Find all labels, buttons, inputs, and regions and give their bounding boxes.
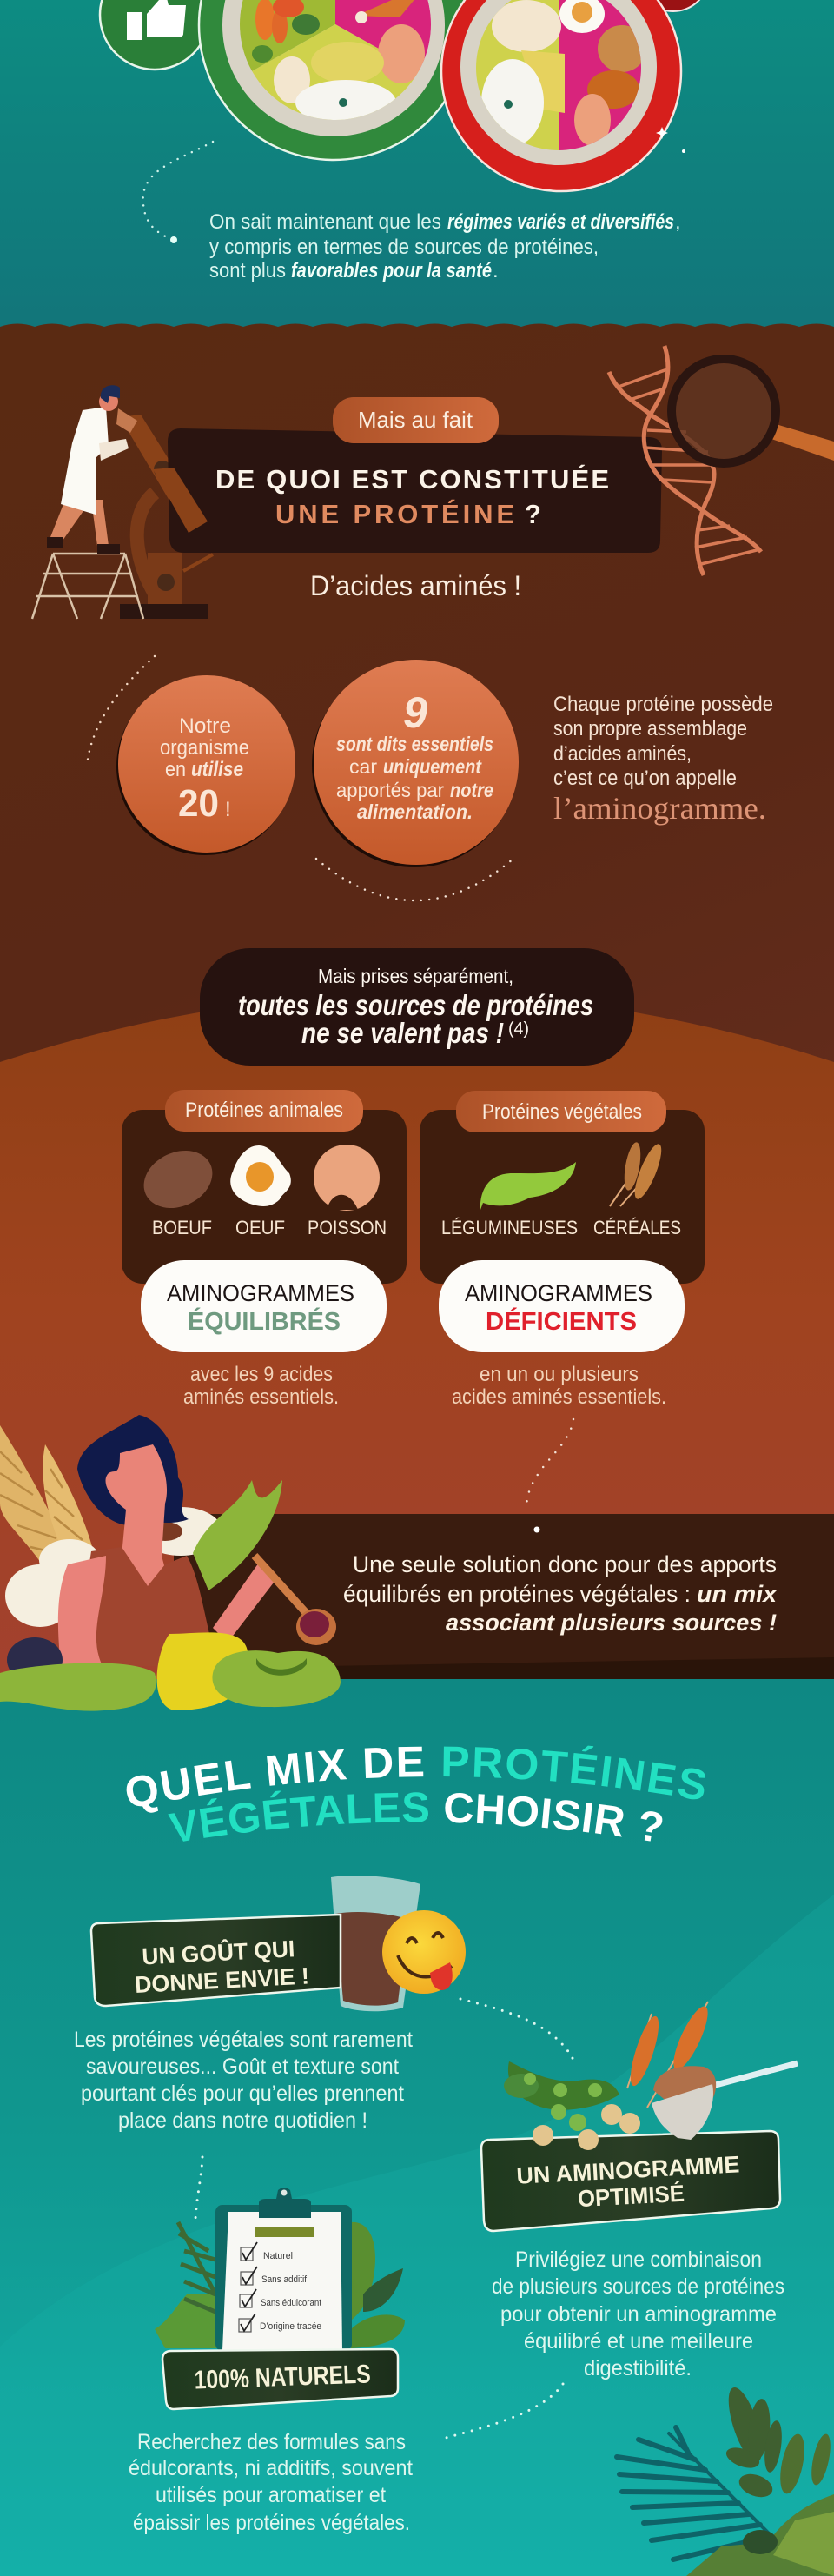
heading text: UNE PROTÉINE <box>275 499 514 529</box>
text block: régimes variés: y compris en termes de sources de protéines, <box>209 236 599 259</box>
text block: régimes variés: . <box>493 259 499 282</box>
callout text: toutes les sources de protéines <box>238 989 593 1021</box>
circle text: ! <box>225 798 231 821</box>
text block: régimes variés: , <box>675 210 681 234</box>
dotted arrow: plates to text <box>143 142 213 243</box>
panel: heading <box>168 428 662 553</box>
text: aminogramme: pour obtenir un aminogramme <box>500 2302 777 2327</box>
circle text <box>160 714 249 825</box>
ladder <box>32 554 143 619</box>
leaves right <box>351 2222 405 2348</box>
text: aminogramme: c’est ce qu’on appelle <box>553 767 737 790</box>
dark red circle <box>638 0 709 11</box>
text: naturels <box>129 2430 413 2535</box>
icon: salmon <box>314 1145 380 1211</box>
text: naturels: épaissir les protéines végétales. <box>133 2511 410 2535</box>
label: aminogramme optimisé <box>481 2131 780 2231</box>
red plate <box>441 0 681 191</box>
text: solution: équilibrés en protéines végétales : <box>343 1581 691 1607</box>
label: un goût: DONNE ENVIE ! <box>134 1962 310 1998</box>
text: goût: savoureuses... Goût et texture sont <box>86 2055 399 2079</box>
circle text: sont dits essentiels <box>336 733 493 755</box>
illustration: scoop and chickpeas over label <box>533 2063 798 2150</box>
plant labels: LÉGUMINEUSES <box>441 1217 578 1238</box>
illustration: DNA and magnifier <box>609 346 834 575</box>
heading text: DE QUOI EST CONSTITUÉE <box>215 464 609 495</box>
title: quel mix: VÉGÉTALES CHOISIR ? <box>168 1790 662 1842</box>
label: aminogramme optimisé: UN AMINOGRAMME <box>516 2151 740 2189</box>
text: solution: Une seule solution donc pour des apports <box>353 1551 777 1577</box>
text: goût <box>74 2028 413 2133</box>
dotted arrow: goût to aminogramme <box>460 1999 574 2061</box>
text block: régimes variés: On sait maintenant que les <box>209 210 441 234</box>
checklist <box>239 2242 321 2332</box>
circle text: uniquement <box>383 755 482 778</box>
circle: 9 essential <box>312 660 519 867</box>
panel: plant proteins <box>420 1091 705 1352</box>
illustration: woman with spoon <box>0 1415 341 1711</box>
illustration: microscope <box>116 408 213 619</box>
circle text: utilise <box>191 758 243 781</box>
dotted arc: left of circles <box>87 656 155 767</box>
circle text: Notre <box>179 714 231 738</box>
animal labels: POISSON <box>308 1217 387 1238</box>
cream shapes <box>139 1507 222 1556</box>
text: goût: Les protéines végétales sont rarement <box>74 2028 413 2052</box>
label: 100% naturels: 100% NATURELS <box>194 2360 371 2395</box>
sparkles <box>656 127 685 153</box>
checklist: Naturel <box>263 2251 293 2261</box>
illustration: pods and wheat <box>504 2002 714 2131</box>
thumbs-up badge <box>100 0 209 70</box>
spoon <box>255 1556 336 1645</box>
checklist: Sans additif <box>261 2274 308 2285</box>
label: un goût <box>91 1915 341 2006</box>
text: aminogramme <box>553 693 773 826</box>
circle text: notre <box>450 779 493 801</box>
text: aminogramme: digestibilité. <box>584 2356 692 2380</box>
illustration: clipboard <box>155 2188 405 2351</box>
text block: régimes variés: régimes variés et diversifiés <box>447 210 674 234</box>
title: quel mix: QUEL MIX DE PROTÉINES <box>127 1745 705 1813</box>
dotted arc: under circle 2 <box>316 859 513 900</box>
callout text: Mais prises séparément, <box>318 965 513 987</box>
pill: Protéines animales: Protéines animales <box>185 1099 343 1122</box>
corn <box>157 1632 248 1710</box>
text: naturels: utilisés pour aromatiser et <box>156 2483 386 2507</box>
circle: 20 amino acids <box>116 675 295 855</box>
circle text <box>336 688 493 823</box>
label: aminogramme optimisé: OPTIMISÉ <box>577 2180 685 2212</box>
illustration: scientist on ladder <box>32 385 143 619</box>
text: naturels: édulcorants, ni additifs, souvent <box>129 2456 413 2480</box>
checklist: D’origine tracée <box>260 2321 321 2332</box>
circle text: en <box>165 758 186 781</box>
leaves left <box>155 2222 217 2348</box>
plant labels <box>441 1217 681 1238</box>
icon: wheat <box>610 1141 666 1206</box>
panel: animal proteins <box>122 1090 407 1352</box>
label: 100% naturels <box>162 2349 398 2409</box>
text: captions: en un ou plusieurs <box>480 1363 639 1386</box>
circle text: organisme <box>160 736 249 760</box>
text: aminogramme: Privilégiez une combinaison <box>515 2247 762 2272</box>
text block: régimes variés: sont plus <box>209 259 286 282</box>
callout text: (4) <box>508 1019 529 1039</box>
circle text: apportés par <box>336 779 444 801</box>
icon: thumb <box>127 0 186 40</box>
text: aminogramme: l’aminogramme. <box>553 791 766 826</box>
dotted line: to clipboard <box>195 2157 202 2220</box>
pod bottom <box>0 1663 156 1711</box>
dark balls <box>7 1637 63 1683</box>
label: un goût: UN GOÛT QUI <box>142 1935 295 1969</box>
face and neck <box>106 1444 169 1590</box>
text: aminogramme <box>492 2247 784 2380</box>
dark band <box>174 1514 834 1679</box>
callout text <box>238 965 593 1049</box>
text: aminogramme: Chaque protéine possède <box>553 693 773 716</box>
text: solution <box>343 1551 778 1636</box>
animal labels: OEUF <box>235 1217 285 1238</box>
text: goût: place dans notre quotidien ! <box>118 2108 367 2133</box>
illustration: foliage <box>617 2384 834 2576</box>
plant labels: CÉRÉALES <box>593 1217 681 1238</box>
callout pill: toutes les sources <box>200 948 634 1066</box>
text: aminogramme: équilibré et une meilleure <box>524 2329 753 2354</box>
text: solution: un mix <box>697 1581 778 1607</box>
pill: déficients <box>439 1260 685 1352</box>
hair <box>77 1415 189 1525</box>
text: aminogramme: de plusieurs sources de protéines <box>492 2274 784 2299</box>
text: aminogramme: d’acides aminés, <box>553 742 692 766</box>
text: captions <box>183 1363 666 1409</box>
checklist: Sans édulcorant <box>261 2298 321 2308</box>
illustration: glass <box>331 1876 420 2011</box>
circle text: 9 <box>403 688 427 737</box>
text: solution: associant plusieurs sources ! <box>446 1610 777 1636</box>
wheat <box>0 1425 96 1573</box>
text: naturels: Recherchez des formules sans <box>137 2430 406 2454</box>
big bean <box>212 1650 341 1707</box>
heading text <box>215 464 609 529</box>
pill: équilibrés: ÉQUILIBRÉS <box>188 1306 341 1336</box>
section background: brown protein section <box>0 323 834 1686</box>
text: captions: acides aminés essentiels. <box>452 1385 666 1409</box>
coffee bean <box>148 1522 182 1541</box>
text block: régimes variés: favorables pour la santé <box>291 259 492 282</box>
pill: équilibrés <box>141 1260 387 1352</box>
pill: déficients: DÉFICIENTS <box>486 1306 637 1336</box>
pill: Protéines animales <box>165 1090 363 1132</box>
icon: pea pod <box>480 1162 576 1210</box>
section background: teal top <box>0 0 834 330</box>
pill: Protéines végétales: Protéines végétales <box>482 1100 642 1124</box>
title: quel mix <box>127 1745 705 1842</box>
top <box>74 1547 217 1666</box>
pill: déficients: AMINOGRAMMES <box>465 1280 652 1306</box>
text: goût: pourtant clés pour qu’elles prennent <box>81 2081 404 2106</box>
animal labels <box>152 1217 387 1238</box>
text: D'acides aminés: D’acides aminés ! <box>310 570 521 601</box>
dotted line: to naturels text <box>446 2384 563 2438</box>
pill: Mais au fait: Mais au fait <box>358 407 473 433</box>
section background: teal bottom <box>0 1679 834 2576</box>
green plate <box>199 0 468 160</box>
animal labels: BOEUF <box>152 1217 212 1238</box>
pill: Protéines végétales <box>456 1091 666 1132</box>
callout text: ne se valent pas ! <box>301 1017 504 1049</box>
icon: beef <box>135 1140 222 1218</box>
circle text: 20 <box>178 782 219 825</box>
microscope arm over panel <box>153 468 208 533</box>
heading text: ? <box>525 499 541 529</box>
pill: équilibrés: AMINOGRAMMES <box>167 1280 354 1306</box>
circle text: car <box>349 755 377 778</box>
right arm <box>213 1560 276 1643</box>
icon: emoji <box>382 1910 466 1994</box>
dotted arrow: to band <box>526 1419 573 1533</box>
left arm <box>58 1556 106 1666</box>
pill: Mais au fait <box>333 397 499 443</box>
text: aminogramme: son propre assemblage <box>553 717 747 740</box>
palm frond <box>617 2427 782 2559</box>
text: captions: aminés essentiels. <box>183 1385 339 1409</box>
circle text: alimentation. <box>357 800 473 823</box>
text: captions: avec les 9 acides <box>190 1363 333 1386</box>
green pods <box>193 1480 282 1590</box>
text block: régimes variés <box>209 210 681 282</box>
icon: egg <box>230 1145 291 1206</box>
